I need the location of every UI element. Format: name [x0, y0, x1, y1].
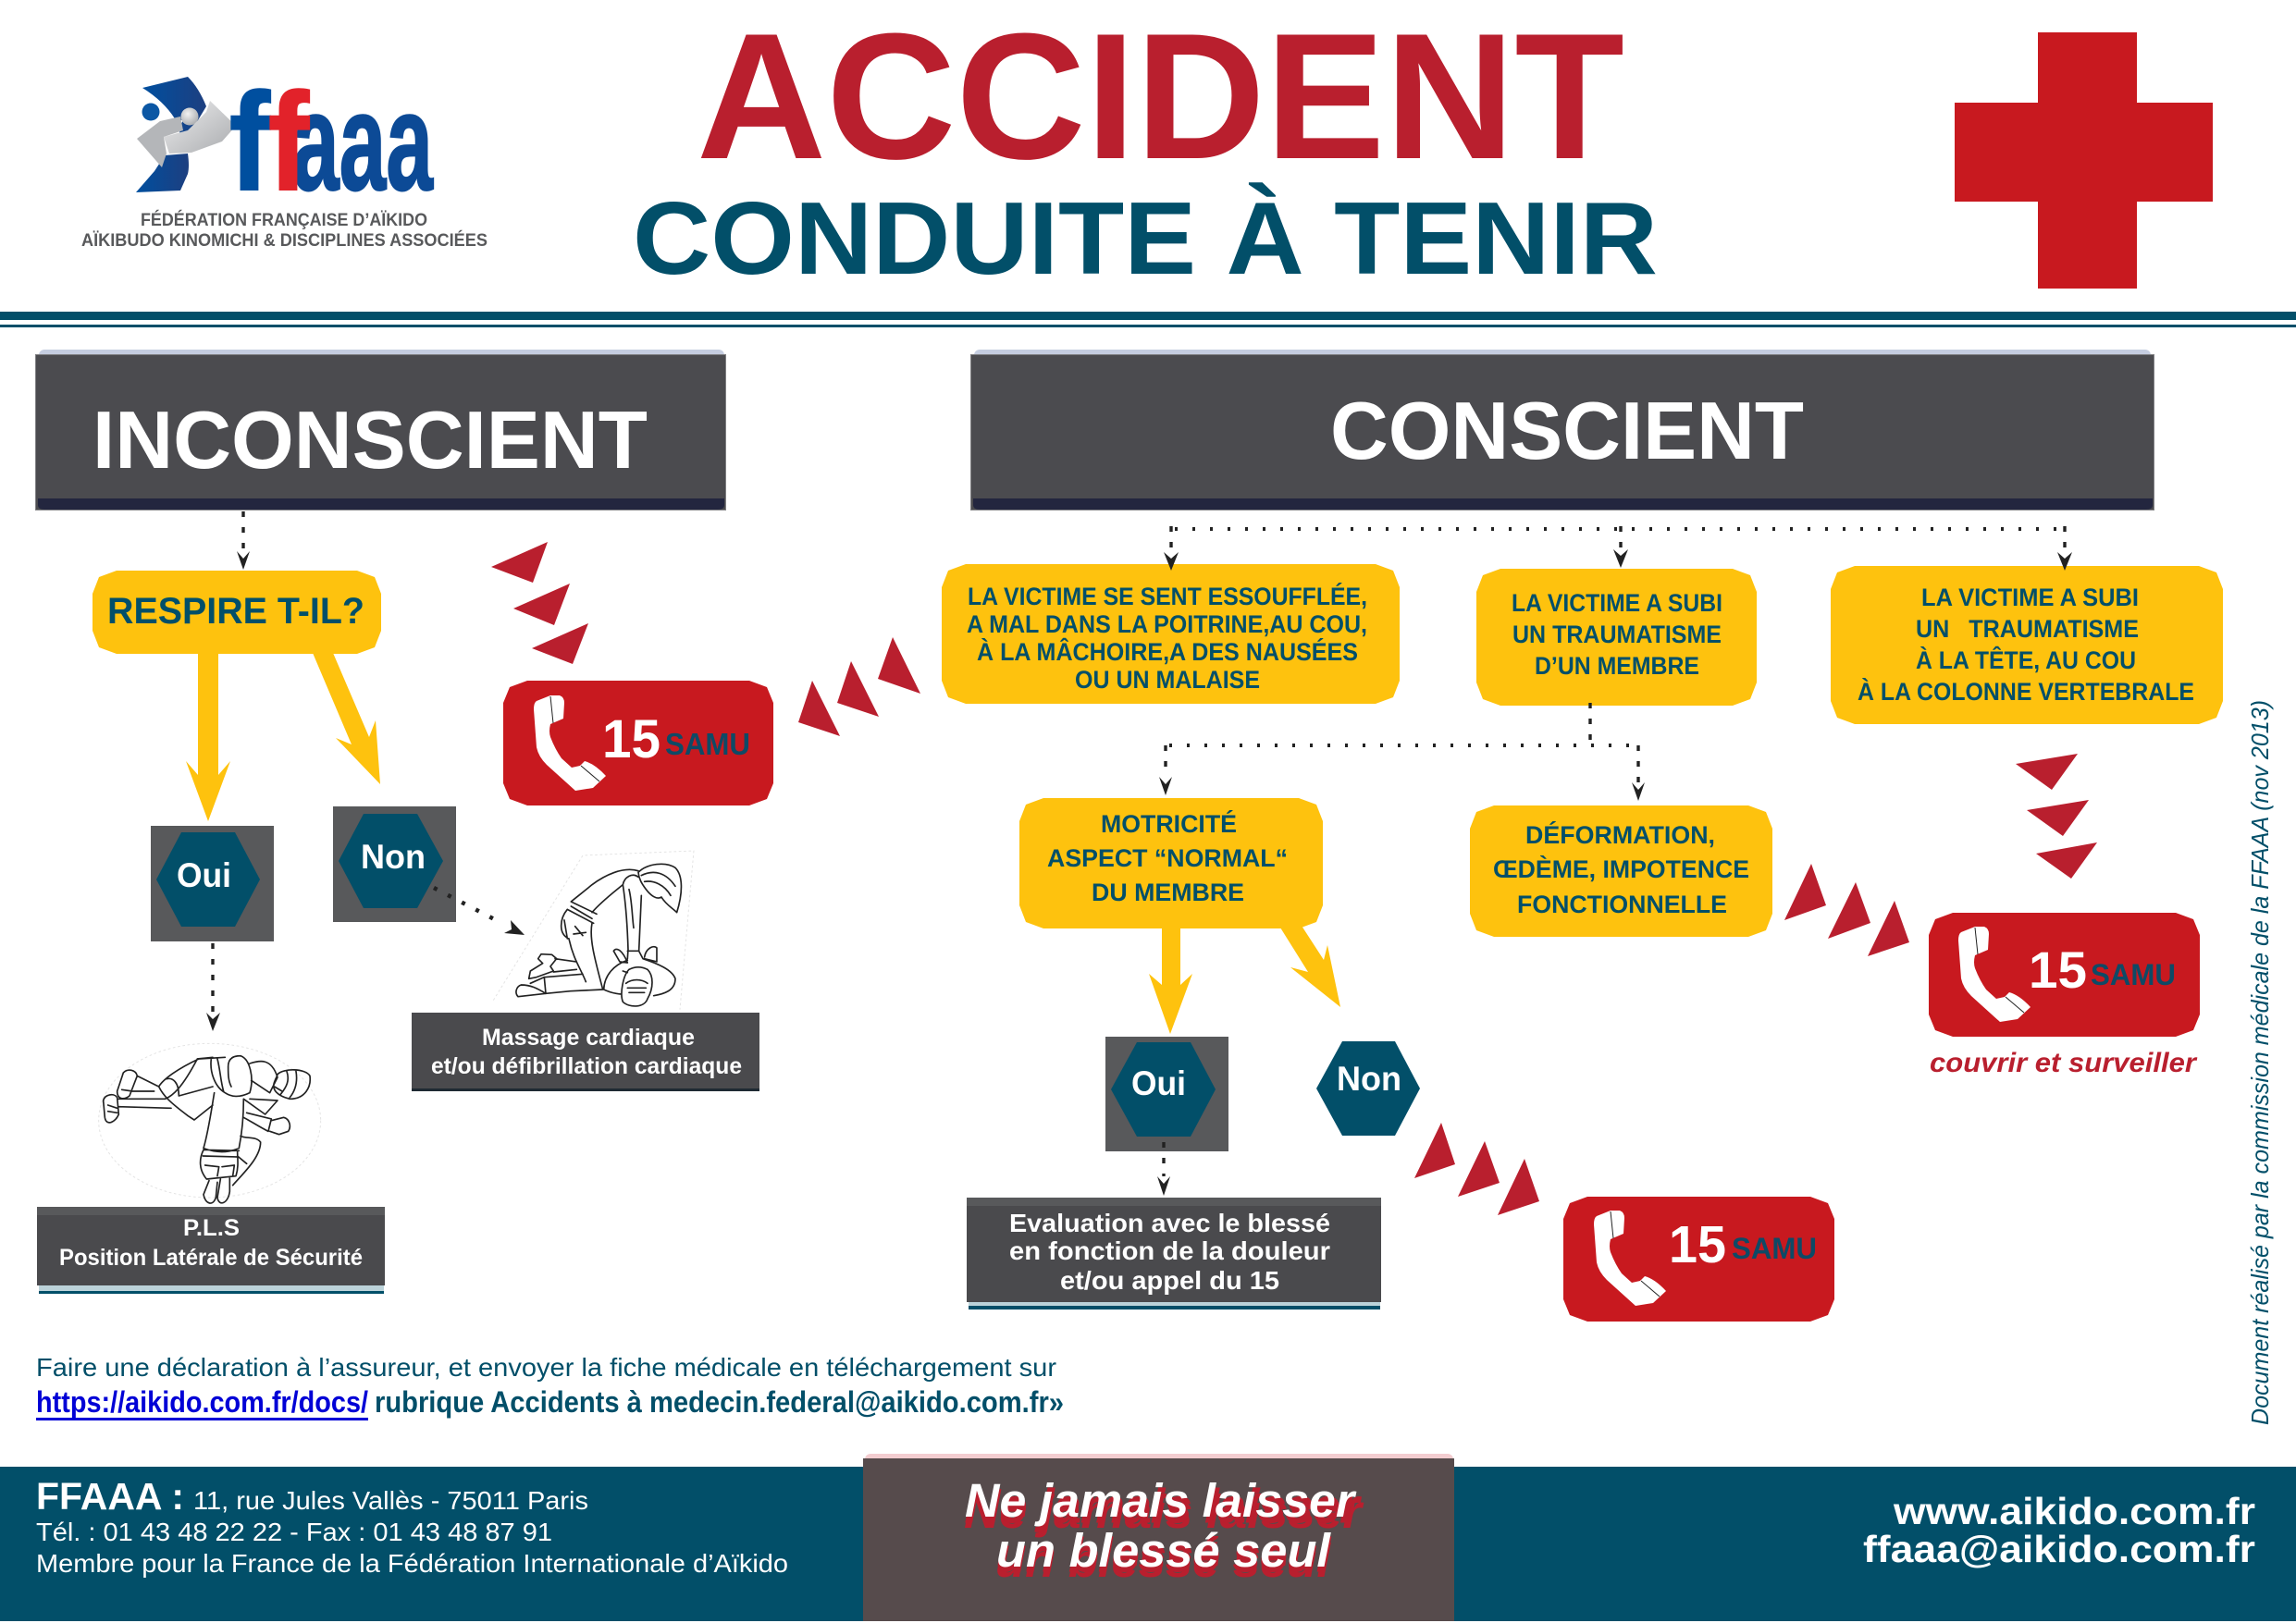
hexagon: oui 2 — [1105, 1037, 1228, 1151]
icon: phone — [534, 695, 606, 791]
box: victime essoufflee: LA VICTIME SE SENT ESSOUFFLÉE, — [968, 582, 1367, 610]
hexagon: oui: Oui — [177, 856, 231, 894]
triangles: from traumatisme tete — [2016, 754, 2097, 879]
text: couvrir et surveiller: couvrir et surveiller — [1930, 1048, 2198, 1078]
box: PLS — [37, 1207, 385, 1294]
icon: phone — [1594, 1211, 1666, 1306]
arrow: respire oui — [186, 653, 230, 821]
box: evaluation: en fonction de la douleur — [1009, 1236, 1330, 1265]
callout: 15 SAMU left: SAMU — [665, 727, 750, 761]
box: deformation: DÉFORMATION, — [1525, 820, 1715, 849]
box: PLS: Position Latérale de Sécurité — [59, 1245, 363, 1271]
arrows: conscient dotted branches — [1164, 526, 2072, 571]
logo caption: AÏKIBUDO KINOMICHI & DISCIPLINES ASSOCIÉES — [81, 230, 488, 251]
hexagon: oui — [151, 826, 274, 941]
illustration: chest compressions — [493, 851, 694, 1010]
panel: CONSCIENT header — [971, 350, 2154, 510]
box: deformation: ŒDÈME, IMPOTENCE — [1493, 855, 1749, 883]
panel: slogan — [863, 1454, 1454, 1621]
box: evaluation: Evaluation avec le blessé — [1009, 1209, 1330, 1237]
text: declaration: Faire une déclaration à l’assureur, et envoyer la fiche médicale en téléchargement sur — [36, 1353, 1056, 1382]
logo letters: f — [268, 64, 310, 219]
box: traumatisme membre — [1476, 569, 1757, 706]
triangles: to samu top — [491, 542, 588, 664]
callout: 15 SAMU left: 15 — [602, 709, 660, 769]
box: motricite: DU MEMBRE — [1092, 879, 1244, 906]
box: RESPIRE T-IL — [93, 571, 381, 654]
callout: 15 SAMU bottom: 15 — [1669, 1215, 1726, 1274]
triangles: from deformation — [1784, 864, 1909, 956]
arrow: oui 2 to evaluation — [1157, 1142, 1170, 1196]
logo caption: FÉDÉRATION FRANÇAISE D’AÏKIDO — [141, 210, 427, 230]
box: traumatisme tete: À LA COLONNE VERTEBRALE — [1858, 677, 2194, 706]
box: traumatisme membre: LA VICTIME A SUBI — [1512, 589, 1722, 617]
subtitle: CONDUITE À TENIR: CONDUITE À TENIR — [633, 181, 1658, 296]
box: massage cardiaque: Massage cardiaque — [482, 1025, 695, 1051]
title: ACCIDENT: ACCIDENT — [697, 0, 1624, 197]
footer address — [36, 1475, 788, 1578]
box: RESPIRE T-IL: RESPIRE T-IL? — [107, 591, 364, 632]
arrow: oui to PLS — [206, 943, 220, 1031]
hexagon: non — [333, 806, 456, 922]
panel: slogan: un blessé seul — [996, 1524, 1332, 1577]
text: side credit: Document réalisé par la commission médicale de la FFAAA (nov 2013) — [2246, 700, 2274, 1425]
icon: red cross — [1955, 32, 2213, 289]
footer contacts: www.aikido.com.fr — [1893, 1490, 2255, 1532]
text: declaration: https://aikido.com.fr/docs/ — [36, 1385, 368, 1419]
box: victime essoufflee: A MAL DANS LA POITRINE,AU COU, — [967, 610, 1367, 638]
box: traumatisme tete — [1831, 566, 2223, 724]
box: motricite: MOTRICITÉ — [1101, 809, 1237, 838]
footer contacts — [1863, 1490, 2255, 1570]
text: declaration: rubrique Accidents à medecin.federal@aikido.com.fr» — [375, 1385, 1064, 1419]
icon: phone — [1958, 927, 2031, 1022]
hexagon: non 2 — [1316, 1041, 1420, 1136]
box: traumatisme tete: UN TRAUMATISME — [1916, 615, 2139, 643]
callout: 15 SAMU right — [1929, 913, 2200, 1037]
box: traumatisme tete: À LA TÊTE, AU COU — [1916, 646, 2136, 674]
triangles: from victim essoufflee — [798, 637, 920, 736]
box: victime essoufflee: OU UN MALAISE — [1075, 666, 1260, 694]
footer address: FFAAA : — [36, 1475, 184, 1518]
text: declaration — [36, 1353, 1064, 1420]
box: massage cardiaque: et/ou défibrillation cardiaque — [431, 1053, 742, 1079]
box: evaluation: et/ou appel du 15 — [1060, 1266, 1279, 1295]
panel: INCONSCIENT header — [35, 350, 725, 510]
box: motricite: ASPECT “NORMAL“ — [1047, 844, 1288, 872]
box: evaluation — [967, 1198, 1381, 1309]
arrow: motricite non — [1280, 926, 1340, 1007]
hexagon: oui 2: Oui — [1131, 1064, 1186, 1102]
footer bar — [0, 1454, 2296, 1621]
box: victime essoufflee: À LA MÂCHOIRE,A DES NAUSÉES — [977, 637, 1358, 666]
panel: slogan: un blessé seul — [996, 1529, 1332, 1581]
arrows: traumatisme membre dotted branches — [1159, 703, 1645, 801]
panel: slogan: un blessé seul — [995, 1534, 1332, 1587]
callout: 15 SAMU right: 15 — [2029, 941, 2087, 999]
hexagon: non: Non — [361, 838, 426, 876]
logo: FFAAA — [81, 64, 488, 251]
arrow: inconscient to respire — [237, 511, 250, 570]
logo letters: aaa — [292, 64, 434, 219]
logo letters — [229, 64, 434, 219]
callout: 15 SAMU left — [503, 681, 773, 805]
logo mark: blue figure and grey swoosh — [136, 77, 236, 192]
box: PLS: P.L.S — [183, 1215, 240, 1241]
box: traumatisme tete: LA VICTIME A SUBI — [1921, 584, 2139, 611]
hexagon: non 2: Non — [1337, 1060, 1401, 1098]
logo letters: f — [229, 64, 271, 219]
box: victime essoufflee — [942, 564, 1400, 704]
panel: slogan: Ne jamais laisser — [965, 1474, 1357, 1527]
callout: 15 SAMU right: SAMU — [2091, 958, 2176, 991]
box: traumatisme membre: UN TRAUMATISME — [1512, 621, 1722, 648]
panel: CONSCIENT header: CONSCIENT — [1330, 385, 1804, 476]
illustration: recovery position — [99, 1043, 321, 1203]
footer contacts: ffaaa@aikido.com.fr — [1863, 1528, 2255, 1570]
callout: 15 SAMU bottom — [1563, 1197, 1834, 1322]
panel: INCONSCIENT header: INCONSCIENT — [93, 394, 648, 486]
triangles: from non 2 — [1414, 1123, 1539, 1215]
box: traumatisme membre: D’UN MEMBRE — [1535, 652, 1699, 680]
box: motricite — [1019, 798, 1323, 928]
footer address: Tél. : 01 43 48 22 22 - Fax : 01 43 48 87 91 — [36, 1518, 552, 1546]
arrow: motricite oui — [1149, 928, 1192, 1034]
callout: 15 SAMU bottom: SAMU — [1732, 1232, 1817, 1265]
box: massage cardiaque — [412, 1013, 759, 1091]
arrow: non to massage — [434, 888, 525, 935]
box: deformation: FONCTIONNELLE — [1517, 891, 1727, 918]
panel: slogan: Ne jamais laisser — [965, 1480, 1362, 1532]
arrow: respire non — [313, 653, 380, 784]
panel: slogan: Ne jamais laisser — [964, 1485, 1364, 1538]
logo caption — [81, 210, 488, 251]
footer address: 11, rue Jules Vallès - 75011 Paris — [193, 1486, 588, 1515]
footer address: Membre pour la France de la Fédération Internationale d’Aïkido — [36, 1549, 788, 1578]
box: deformation — [1470, 805, 1772, 937]
